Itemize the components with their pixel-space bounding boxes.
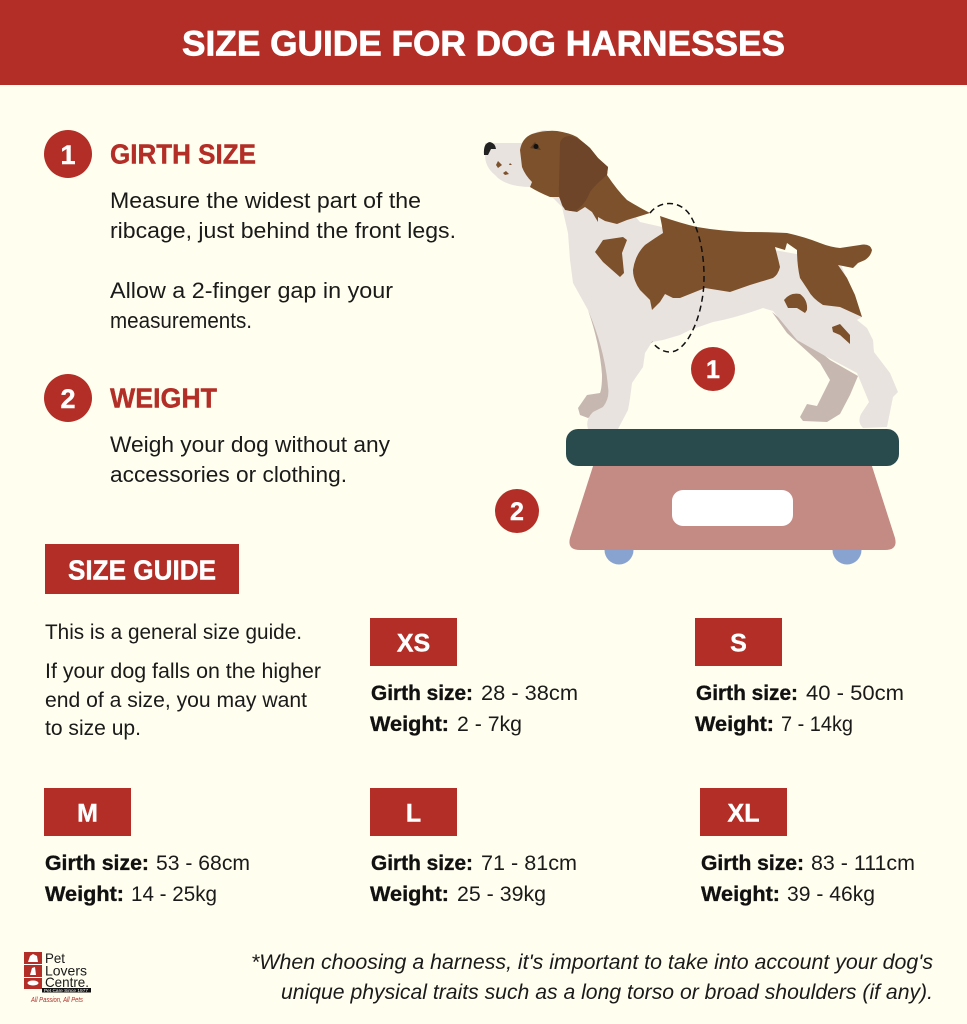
size card: XL: Girth size: <box>701 852 804 875</box>
text: girth measuring instructions <box>110 188 456 333</box>
logo: Pet Lovers Centre: Pet Care Since 1977 <box>44 988 89 993</box>
size card: L: Weight: <box>370 883 449 906</box>
number badge 1 <box>44 130 92 178</box>
size card: M <box>44 788 250 906</box>
panel: girth size instructions <box>44 130 456 333</box>
number badge 2 on scale <box>495 489 539 533</box>
size card: M: Girth size: <box>45 852 149 875</box>
panel: weight instructions <box>44 374 390 487</box>
text: general guide note: end of a size, you may want <box>45 689 307 712</box>
size card: XL: XL <box>728 800 759 828</box>
size card: L <box>370 788 577 906</box>
logo: Pet Lovers Centre: Centre. <box>45 974 89 990</box>
title banner <box>0 0 967 85</box>
measurement: dashed girth line <box>650 203 704 352</box>
heading: weight: WEIGHT <box>110 382 217 414</box>
size card: S: Girth size: <box>696 682 798 705</box>
footnote <box>251 951 934 1004</box>
footnote: unique physical traits such as a long torso or broad shoulders (if any). <box>281 981 933 1004</box>
icon: dog <box>484 130 898 429</box>
text: general guide note: This is a general size guide. <box>45 621 302 644</box>
size card: M: 53 - 68cm <box>156 852 250 875</box>
heading: size guide: SIZE GUIDE <box>68 554 216 586</box>
size card: XS <box>370 618 578 736</box>
text: general guide note <box>45 621 321 740</box>
text: general guide note: If your dog falls on the higher <box>45 660 321 683</box>
text: girth measuring instructions: Measure the widest part of the <box>110 188 421 213</box>
illustration: dog on a scale <box>484 130 899 564</box>
logo: Pet Lovers Centre <box>24 950 91 1004</box>
number badge 2: 2 <box>60 384 76 414</box>
number badge 1 on dog <box>691 347 735 391</box>
logo: Pet Lovers Centre: All Passion, All Pets <box>30 997 83 1004</box>
heading: size guide <box>45 544 239 594</box>
size card: S: 40 - 50cm <box>806 682 904 705</box>
size card: L: 25 - 39kg <box>457 883 546 906</box>
size card: XL: 39 - 46kg <box>787 883 875 906</box>
text: girth measuring instructions: ribcage, just behind the front legs. <box>110 218 456 243</box>
size card: XS: Weight: <box>370 713 449 736</box>
number badge 2 <box>44 374 92 422</box>
logo: Pet Lovers Centre: Lovers <box>45 962 87 978</box>
size card: M: Weight: <box>45 883 124 906</box>
size card: M: 14 - 25kg <box>131 883 217 906</box>
heading: girth size: GIRTH SIZE <box>110 138 256 170</box>
number badge 1: 1 <box>60 140 76 170</box>
size card: XL: Weight: <box>701 883 780 906</box>
logo: Pet Lovers Centre: Pet <box>45 950 65 966</box>
size card: XS: 2 - 7kg <box>457 713 522 736</box>
size card: L: 71 - 81cm <box>481 852 577 875</box>
size card: S <box>695 618 904 736</box>
panel: size guide intro <box>45 544 321 740</box>
size card: L: Girth size: <box>371 852 473 875</box>
footnote: *When choosing a harness, it's important to take into account your dog's <box>251 951 934 974</box>
size card: S: Weight: <box>695 713 774 736</box>
icon: weighing scale <box>566 429 899 564</box>
size card: XS: 28 - 38cm <box>481 682 578 705</box>
text: girth measuring instructions: Allow a 2-finger gap in your <box>110 278 393 303</box>
text: weighing instructions <box>110 432 390 487</box>
text: general guide note: to size up. <box>45 717 141 740</box>
number badge 1 on dog: 1 <box>706 356 720 384</box>
size card: S: 7 - 14kg <box>781 713 853 736</box>
size card: XL: 83 - 111cm <box>811 852 915 875</box>
size card: L: L <box>406 800 421 828</box>
size card: XL <box>700 788 915 906</box>
size card: M: M <box>77 800 98 828</box>
size card: S: S <box>730 630 747 658</box>
text: weighing instructions: Weigh your dog without any <box>110 432 390 457</box>
size card: XS: XS <box>397 630 430 658</box>
number badge 2 on scale: 2 <box>510 498 524 526</box>
text: girth measuring instructions: measurements. <box>110 308 252 333</box>
size card: XS: Girth size: <box>371 682 473 705</box>
text: weighing instructions: accessories or clothing. <box>110 462 347 487</box>
title banner: SIZE GUIDE FOR DOG HARNESSES <box>182 24 785 64</box>
